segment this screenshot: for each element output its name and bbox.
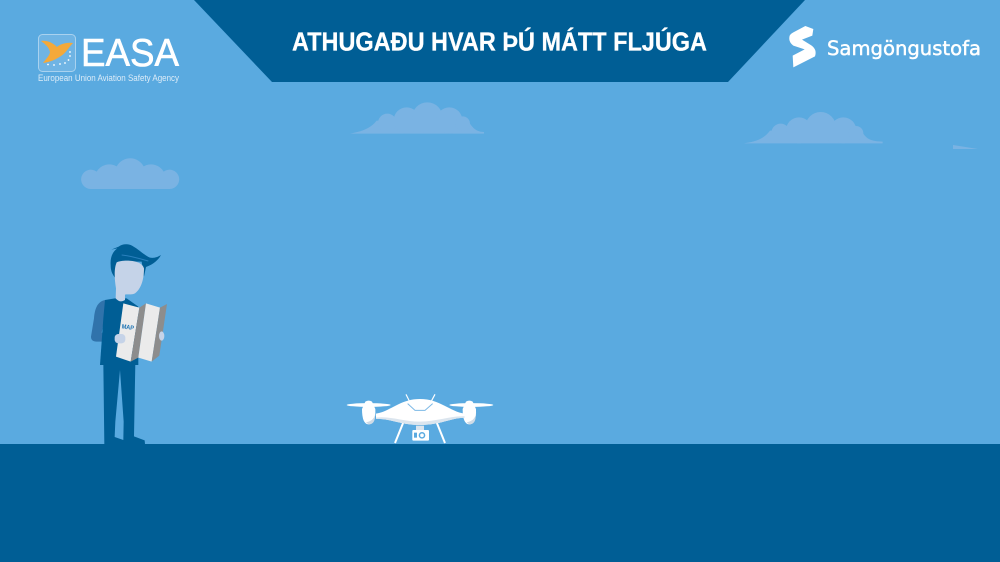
icon: EASA bird emblem (38, 34, 76, 72)
drone legs (395, 422, 403, 443)
cloud: upper right (744, 112, 883, 143)
hand: right (159, 331, 164, 341)
title: ATHUGAÐU HVAR ÞÚ MÁTT FLJÚGA (292, 26, 707, 56)
title banner (194, 0, 805, 82)
canopy line (408, 404, 433, 410)
hand: left (115, 334, 125, 343)
map (116, 303, 167, 362)
right rotor (449, 401, 493, 424)
wordmark: EASA: EASA (81, 32, 179, 75)
left rotor (347, 401, 391, 424)
back arm (91, 300, 115, 342)
camera (412, 426, 429, 441)
antennas (406, 394, 435, 404)
wordmark: Samgöngustofa: Samgöngustofa (827, 37, 981, 60)
torso (100, 298, 138, 365)
hair highlight (122, 255, 148, 261)
icon: S emblem (789, 26, 816, 67)
logo: EASA (38, 32, 179, 83)
tagline: European Union Aviation Safety Agency (38, 73, 179, 83)
drone (347, 394, 493, 443)
hair (111, 244, 161, 278)
ground band (0, 444, 1000, 562)
cloud sliver: far right (953, 145, 978, 149)
person reading a map (91, 244, 167, 444)
body shading (376, 416, 465, 425)
face and neck (115, 261, 144, 301)
legs (103, 363, 145, 444)
logo: Samgöngustofa (789, 26, 981, 67)
cloud: left (81, 158, 179, 189)
cloud: upper centre (350, 102, 484, 134)
drone body (376, 399, 465, 425)
map label: MAP (121, 323, 134, 332)
